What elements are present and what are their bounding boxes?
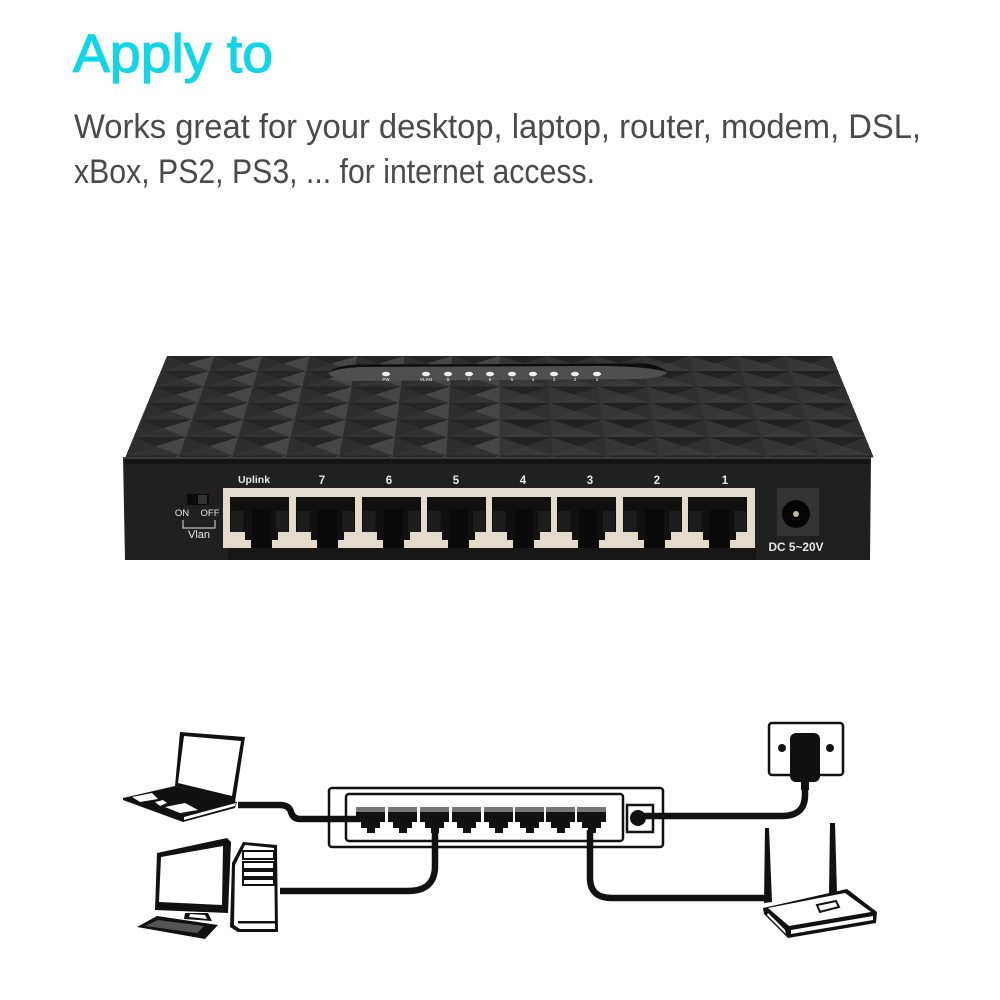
port labels: 2	[654, 475, 660, 487]
title block	[72, 24, 921, 191]
LED indicator panel: 8	[447, 377, 450, 382]
beige port strip	[223, 488, 755, 548]
LED indicator panel: VLAN	[420, 377, 432, 382]
icon: router	[763, 823, 877, 938]
port labels: 6	[386, 475, 392, 487]
port labels: 3	[587, 475, 593, 487]
port labels: Uplink	[238, 474, 270, 486]
icon: laptop	[123, 732, 245, 822]
description text: xBox, PS2, PS3, ... for internet access.	[74, 153, 595, 191]
switch front panel	[123, 457, 871, 560]
LED indicator panel: 1	[596, 377, 599, 382]
description text: Works great for your desktop, laptop, router, modem, DSL,	[74, 108, 921, 146]
port labels	[238, 474, 729, 487]
LED indicator panel: PW	[382, 377, 390, 382]
icon: wall outlet with adapter	[769, 723, 843, 790]
description text	[74, 108, 921, 191]
port labels: 1	[722, 475, 729, 487]
network switch photo	[123, 356, 874, 560]
lower dark band	[228, 548, 756, 560]
port labels: 4	[520, 475, 527, 487]
icon: desktop computer	[137, 838, 278, 939]
icon: switch outline	[329, 788, 663, 847]
port labels: 5	[453, 475, 460, 487]
LED indicator panel	[328, 364, 667, 382]
DC power jack	[768, 488, 824, 554]
VLAN switch: OFF	[200, 508, 220, 519]
LED indicator panel: 3	[553, 377, 556, 382]
LED indicator panel: 4	[532, 377, 535, 382]
switch diagram ports	[356, 807, 646, 833]
cables	[238, 782, 805, 898]
ethernet ports	[230, 497, 747, 548]
switch top surface with diamond texture	[126, 356, 874, 458]
VLAN switch: Vlan	[188, 529, 210, 541]
LED indicator panel: 2	[574, 377, 577, 382]
LED indicator panel: 5	[511, 377, 514, 382]
VLAN switch: ON	[175, 508, 189, 519]
VLAN switch	[175, 494, 220, 541]
LED indicator panel: 6	[489, 377, 492, 382]
DC power jack: DC 5~20V	[768, 542, 824, 554]
port labels: 7	[319, 475, 325, 487]
heading: Apply to: Apply to	[73, 24, 273, 84]
LED indicator panel: 7	[468, 377, 471, 382]
